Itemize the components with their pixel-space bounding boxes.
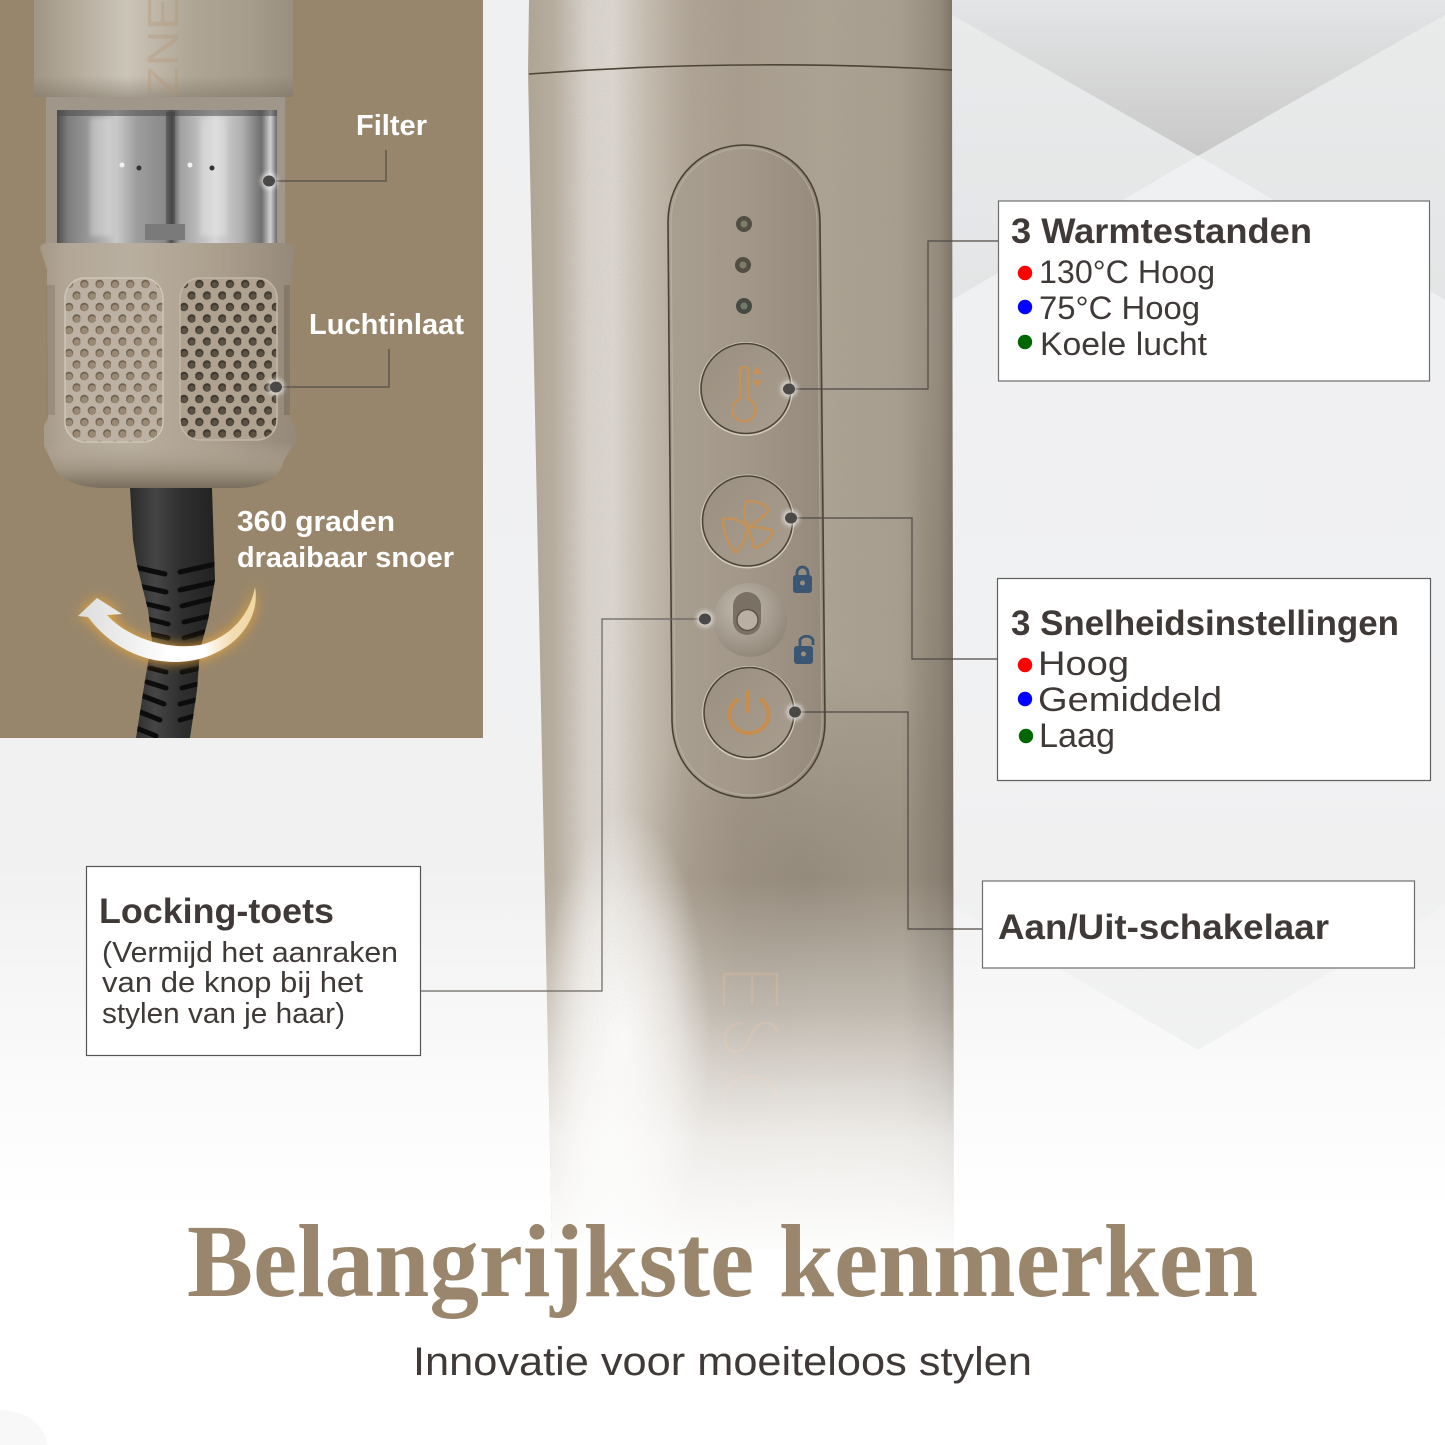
neck (46, 97, 285, 247)
product: hair tool handle (528, 0, 990, 1270)
subtitle: Innovatie voor moeiteloos stylen (413, 1340, 1032, 1384)
description (102, 937, 398, 1030)
icon: open lock (794, 636, 813, 664)
callout: power switch: Aan/Uit-schakelaar (998, 908, 1329, 947)
description: (Vermijd het aanraken (102, 937, 398, 969)
callout: speed settings (998, 578, 1430, 780)
list item: high: Hoog (1038, 645, 1129, 683)
label: swivel cord: draaibaar snoer (237, 542, 454, 574)
side perforations (46, 285, 55, 415)
label: air inlet: Luchtinlaat (309, 309, 464, 341)
list item: high: 130°C Hoog (1039, 254, 1215, 290)
button: power (702, 666, 796, 760)
cord (130, 488, 216, 738)
callout: heat settings (998, 201, 1430, 381)
label: swivel cord: 360 graden (237, 506, 395, 538)
label: filter: Filter (356, 110, 427, 142)
list item: medium: 75°C Hoog (1039, 290, 1200, 326)
heading: Locking-toets (99, 892, 334, 931)
leader: power button (786, 704, 982, 929)
list item: low: Laag (1039, 717, 1115, 755)
indicator lights (735, 216, 752, 314)
left grille (65, 278, 163, 442)
button: fan speed (700, 474, 794, 568)
label: swivel cord (237, 506, 454, 574)
heading: 3 Warmtestanden (1011, 212, 1312, 251)
product: tool base (34, 0, 296, 488)
callout: power switch (982, 881, 1414, 968)
description: van de knop bij het (102, 967, 363, 999)
panel: detail photo of air inlet and cord (0, 0, 483, 738)
leader: filter (260, 150, 386, 190)
locking slider (713, 583, 787, 657)
inlet housing (40, 243, 296, 487)
title: Belangrijkste kenmerken (187, 1204, 1258, 1319)
button: temperature (699, 342, 793, 436)
leader: locking key (420, 610, 714, 991)
icon: closed lock (793, 567, 812, 593)
upper cylinder (34, 0, 293, 97)
fade to white (545, 880, 954, 1250)
heading: 3 Snelheidsinstellingen (1011, 604, 1399, 643)
seam line (529, 65, 952, 74)
leader: speed button (782, 510, 997, 659)
faint rotated logo: ZNE (139, 0, 188, 97)
arrow: 360 degree rotation (78, 587, 256, 662)
list item: cool: Koele lucht (1040, 326, 1207, 362)
right grille (180, 278, 277, 440)
description: stylen van je haar) (102, 998, 345, 1030)
faint logo on the handle (724, 974, 778, 1102)
callout: locking key (86, 866, 420, 1056)
control panel (668, 145, 825, 798)
leader: air inlet (268, 349, 389, 396)
filter glass (57, 110, 277, 246)
leader: heat button (780, 241, 998, 398)
list item: medium: Gemiddeld (1038, 681, 1222, 719)
